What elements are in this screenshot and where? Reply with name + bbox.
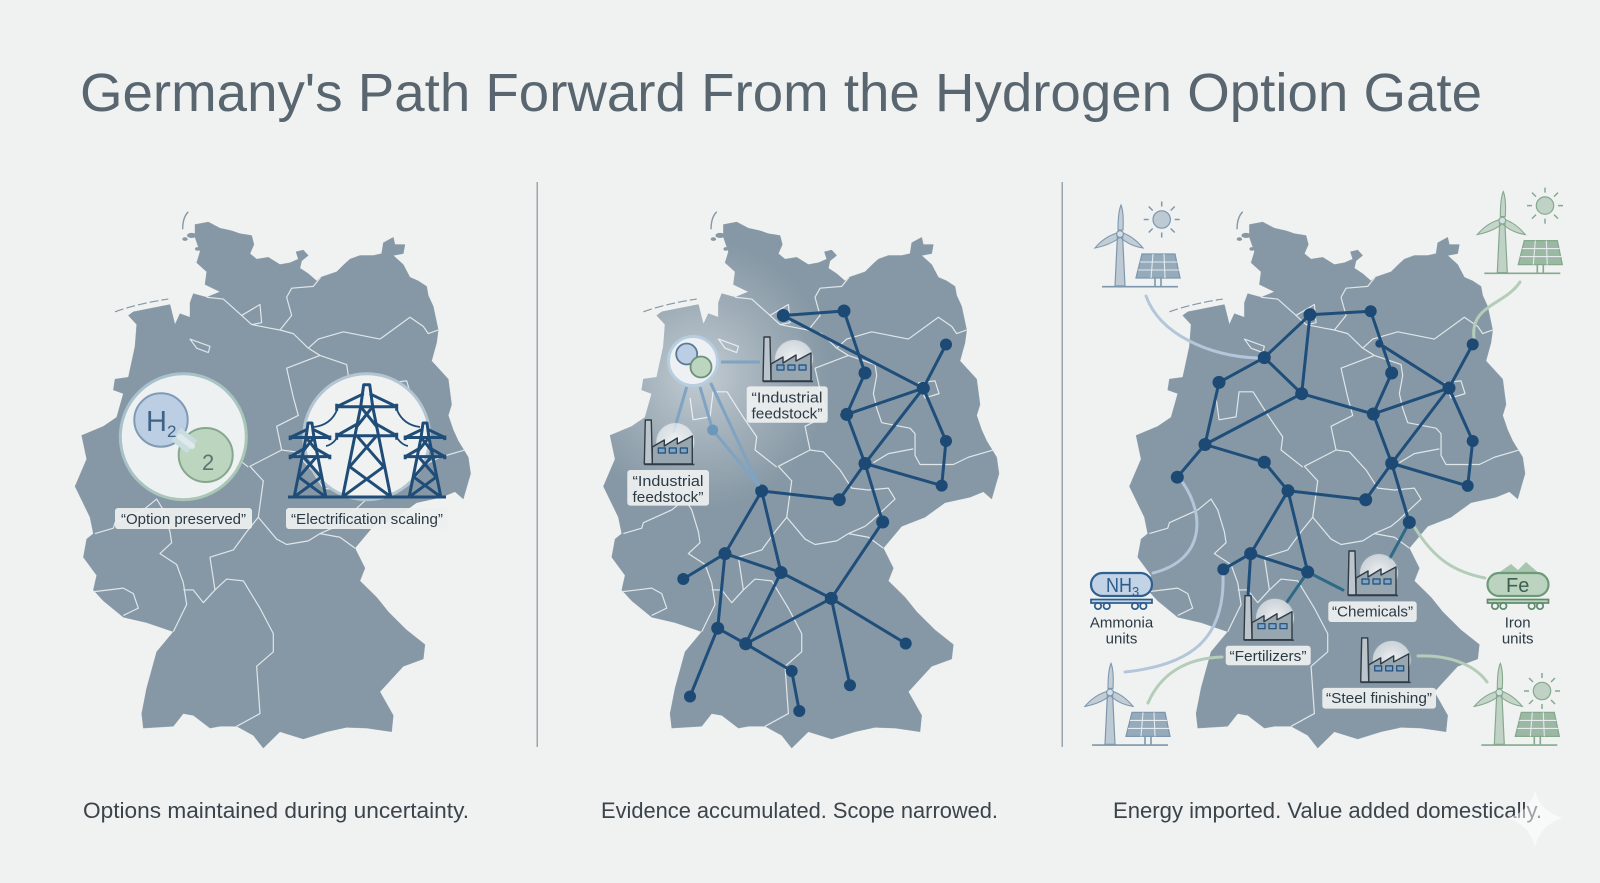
caption left: Options maintained during uncertainty. [83,798,469,823]
icon: iron rail tanker: Fe [1506,575,1529,597]
label: industrial feedstock 1: “Industrial [752,390,822,406]
label: ammonia units: Ammonia [1090,615,1154,632]
icon: renewables bottom left [1085,663,1170,745]
label: ammonia units [1090,615,1154,648]
panel: energy imported [1085,188,1563,748]
map of Germany, left [75,212,471,748]
sparkle mark [1507,791,1563,847]
icon: hydrogen circle [120,374,246,500]
label: ammonia units: units [1106,630,1137,648]
network grid [677,304,952,717]
label: electrification scaling: “Electrification scaling” [291,511,443,528]
icon: ammonia rail tanker: NH [1106,575,1132,597]
map of Germany, right [1129,212,1525,748]
icon: hydrogen circle: H [146,406,167,438]
label: industrial feedstock 2 [627,470,709,506]
map of Germany, centre [603,212,999,748]
panel: evidence accumulated [570,212,999,748]
panel: options preserved [75,212,471,748]
icon: factory 2 [644,420,696,464]
label: option preserved: “Option preserved” [121,511,246,528]
label: industrial feedstock 2: feedstock” [632,489,704,506]
icon: electricity pylons [288,374,446,500]
label: iron units [1502,615,1534,648]
label: steel finishing: “Steel finishing” [1326,690,1432,707]
icon: factory 1 [763,337,815,382]
icon: renewables top left [1095,202,1180,287]
caption centre: Evidence accumulated. Scope narrowed. [601,798,998,823]
label: industrial feedstock 2: “Industrial [632,473,704,490]
icon: chemicals factory [1348,551,1400,596]
small relay node [707,424,718,436]
label: chemicals: “Chemicals” [1332,604,1413,620]
icon: renewables bottom right [1474,663,1560,745]
label: fertilizers: “Fertilizers” [1230,648,1306,665]
icon: hydrogen circle: 2 [167,422,176,441]
icon: renewables top right [1477,188,1563,273]
icon: hydrogen circle: 2 [202,450,214,475]
label: iron units: units [1502,630,1534,648]
icon: fertilizers factory [1244,596,1296,640]
label: industrial feedstock 1: feedstock” [752,406,823,422]
hydrogen glow [610,266,809,488]
icon: ammonia rail tanker [1091,573,1152,609]
icon: steel finishing factory [1361,638,1413,682]
label: iron units: Iron [1505,615,1531,632]
icon: iron rail tanker [1488,562,1548,609]
caption right: Energy imported. Value added domestically. [1113,798,1542,823]
import curves [1125,282,1520,703]
label: industrial feedstock 1 [747,386,828,423]
hub connector lines [673,362,841,486]
icon: ammonia rail tanker: 3 [1132,584,1139,599]
network grid [1171,305,1479,602]
title: Germany's Path Forward From the Hydrogen Option Gate [80,63,1482,123]
divider left [536,182,538,747]
divider right [1062,182,1063,747]
hub: hydrogen icon [668,336,718,386]
